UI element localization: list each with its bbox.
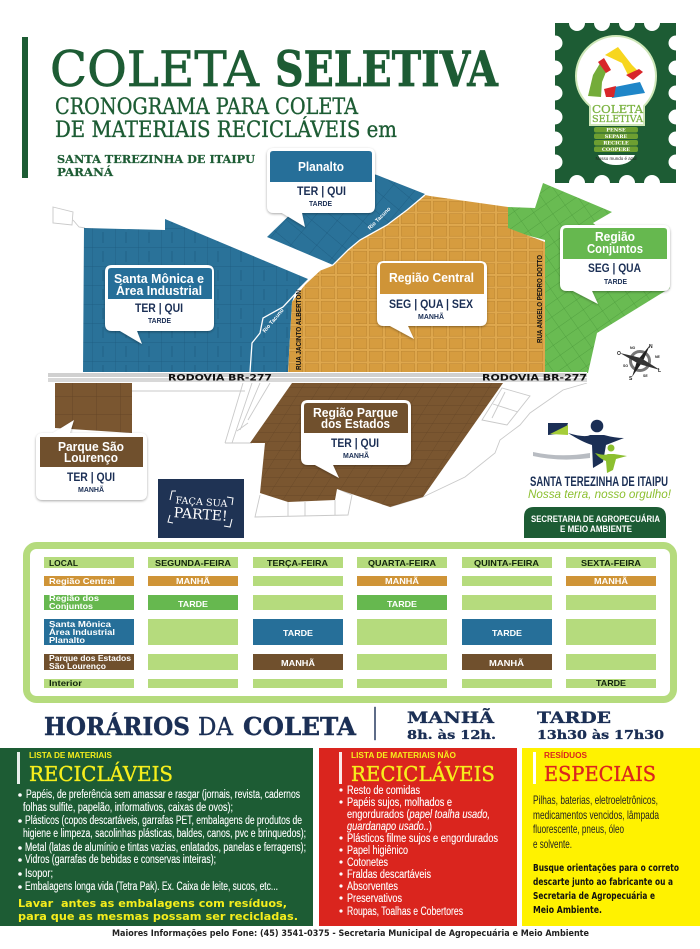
table row text: MANHÃ (281, 658, 315, 668)
non-recyclable list: Cotonetes (347, 857, 388, 869)
table row text (49, 576, 628, 688)
callout: regiao conjuntos: SEG | QUA (588, 261, 641, 275)
road: rodovia br-277: RODOVIA BR-277 (168, 374, 272, 384)
table row text: TARDE (492, 629, 523, 638)
non-recyclable list: Roupas, Toalhas e Cobertores (347, 906, 463, 918)
callout: planalto (267, 148, 375, 227)
table header text: QUARTA-FEIRA (368, 559, 436, 568)
icon: compass: L (658, 368, 661, 374)
collection hours: tarde (537, 708, 664, 742)
panel heading: ESPECIAIS (544, 762, 656, 786)
table row text: TARDE (387, 600, 418, 609)
orange row (44, 576, 656, 586)
stamp logo: coleta seletiva bulb: RECICLE (603, 141, 629, 147)
material list: Plásticos (copos descartáveis, garrafas PET, embalagens de produtos de (25, 815, 302, 827)
collection hours: manha: 8h. às 12h. (407, 727, 496, 742)
material list (18, 789, 306, 893)
non-recyclable list (339, 785, 498, 918)
non-recyclable list: Preservativos (347, 893, 402, 905)
river (250, 195, 425, 372)
subtitle (55, 95, 397, 143)
callout: santa monica e area industrial: TARDE (148, 316, 171, 325)
table header text: LOCAL (49, 559, 78, 568)
map (48, 165, 670, 517)
table row text: São Lourenço (49, 662, 106, 671)
special waste list: fluorescente, pneus, óleo (533, 822, 624, 836)
table header text: SEGUNDA-FEIRA (155, 559, 231, 568)
table header text (49, 559, 641, 568)
callout: parque sao lourenco: Lourenço (64, 450, 118, 465)
label: secretaria de agropecuaria: SECRETARIA DE AGROPECUÁRIA (531, 514, 660, 524)
title: coleta seletiva: SELETIVA (275, 40, 499, 98)
schedule table (26, 546, 674, 700)
icon: flag and figures (533, 420, 627, 473)
callout: parque sao lourenco: Parque São (58, 439, 124, 454)
stamp logo: coleta seletiva bulb: PENSE (606, 128, 626, 134)
panel heading (29, 751, 173, 786)
region: conjuntos (507, 183, 670, 373)
table row text: Planalto (49, 636, 85, 645)
material list: Embalagens longa vida (Tetra Pak). Ex. Caixa de leite, sucos, etc... (25, 881, 278, 893)
panel heading: RESÍDUOS (544, 751, 588, 760)
non-recyclable list: Fraldas descartáveis (347, 869, 431, 881)
region: parque dos estados (250, 383, 503, 507)
guidance note (533, 863, 679, 916)
region: central (288, 195, 545, 373)
title block (22, 37, 499, 179)
callout: parque sao lourenco (36, 420, 147, 500)
panel heading: LISTA DE MATERIAIS NÃO (351, 751, 456, 760)
footer: Maiores Informações pelo Fone: (45) 3541-0375 - Secretaria Municipal de Agropecuária e Meio Ambiente (112, 929, 589, 939)
callout: santa monica e area industrial: Área Industrial (116, 283, 202, 298)
panel: nao reciclaveis (319, 748, 517, 926)
green row (44, 595, 447, 610)
title: coleta seletiva: COLETA (50, 41, 260, 98)
non-recyclable list: Resto de comidas (347, 785, 420, 797)
callout: regiao parque dos estados: dos Estados (321, 416, 390, 431)
material list: Papéis, de preferência sem amassar e rasgar (jornais, revista, cadernos (26, 789, 300, 801)
table row text: MANHÃ (594, 576, 628, 586)
callout: parque sao lourenco: MANHÃ (78, 485, 105, 494)
map outlines (53, 207, 587, 517)
guidance note: Secretaria de Agropecuária e (533, 890, 655, 902)
table row text: Interior (49, 679, 83, 688)
stamp logo: coleta seletiva bulb (548, 15, 684, 191)
stamp logo: coleta seletiva bulb: Nosso mundo é azul (595, 156, 637, 161)
material list: Metal (latas de alumínio e tintas vazias, enlatados, panelas e ferragens); (25, 842, 306, 854)
callout: regiao conjuntos: Região (595, 229, 635, 244)
table header text: QUINTA-FEIRA (474, 559, 539, 568)
badge: faca sua parte (158, 479, 244, 538)
stamp logo: coleta seletiva bulb: SEPARE (605, 134, 628, 140)
blue row (44, 619, 552, 645)
callout: planalto: Planalto (298, 159, 344, 174)
badge: faca sua parte: PARTE! (173, 505, 228, 525)
label: secretaria de agropecuaria (524, 507, 666, 538)
callout: santa monica e area industrial (105, 265, 214, 344)
location: SANTA TEREZINHA DE ITAIPU (57, 152, 255, 166)
icon: compass: SE (643, 374, 648, 378)
special waste list (533, 793, 659, 851)
heading: horarios da coleta: HORÁRIOS (44, 712, 190, 741)
stamp logo: coleta seletiva bulb: COOPERE (602, 147, 630, 153)
logo slogan: Nossa terra, nosso orgulho! (528, 487, 672, 501)
panel heading (544, 751, 656, 786)
callout: regiao central: SEG | QUA | SEX (389, 297, 473, 311)
collection hours: manha: MANHÃ (407, 708, 495, 727)
callout: regiao parque dos estados: TER | QUI (331, 436, 379, 450)
table row text: MANHÃ (385, 576, 419, 586)
stamp logo: coleta seletiva bulb: SELETIVA (592, 114, 643, 125)
icon: compass: O (617, 351, 621, 357)
table row text: Região dos (49, 594, 99, 603)
collection hours: manha (407, 708, 496, 742)
table header text: TERÇA-FEIRA (267, 559, 328, 568)
callout: regiao conjuntos: Conjuntos (587, 241, 643, 256)
panel: reciclaveis (0, 748, 313, 926)
non-recyclable list: Absorventes (347, 881, 398, 893)
label: secretaria de agropecuaria: E MEIO AMBIENTE (560, 524, 632, 534)
callout: regiao central: MANHÃ (418, 312, 445, 321)
heading: horarios da coleta: COLETA (243, 712, 357, 741)
region: santa monica (83, 219, 308, 372)
panel heading: RECICLÁVEIS (29, 762, 173, 786)
callout: parque sao lourenco: TER | QUI (67, 470, 115, 484)
material list: folhas sulfite, papelão, informativos, caixas de ovos); (23, 802, 233, 814)
table row text: MANHÃ (489, 658, 524, 668)
location: PARANÁ (57, 165, 114, 179)
callout: regiao parque dos estados (301, 400, 411, 478)
title: coleta seletiva (50, 40, 499, 98)
brown row (44, 654, 552, 670)
wash note (18, 897, 298, 923)
icon: compass: N (649, 344, 653, 350)
panel heading: LISTA DE MATERIAIS (29, 751, 113, 760)
non-recyclable list: Plásticos filme sujos e engordurados (347, 833, 498, 845)
subtitle: DE MATERIAIS RECICLÁVEIS em (55, 116, 397, 143)
callout: planalto: TARDE (309, 199, 332, 208)
road: rodovia br-277: RODOVIA BR-277 (482, 374, 587, 384)
callout: regiao conjuntos (560, 225, 670, 304)
non-recyclable list: engordurados (papel toalha usado, (347, 809, 490, 821)
panel: residuos especiais (522, 748, 700, 926)
heading: horarios da coleta: DA (198, 712, 233, 741)
icon: compass: S (629, 376, 633, 382)
collection hours: tarde: TARDE (537, 708, 611, 727)
region: planalto (267, 165, 425, 265)
region: parque sao lourenco (55, 382, 132, 433)
table row text: MANHÃ (176, 576, 210, 586)
icon: compass: SO (623, 364, 628, 368)
wash note: para que as mesmas possam ser recicladas. (18, 910, 298, 923)
special waste list: e solvente. (533, 837, 572, 851)
heading: horarios da coleta (44, 707, 376, 741)
table row text: Conjuntos (49, 602, 93, 611)
table row text: Área Industrial (49, 627, 115, 637)
guidance note: Meio Ambiente. (533, 905, 602, 916)
badge: faca sua parte: FAÇA SUA (175, 495, 228, 510)
callout: santa monica e area industrial: Santa Mônica e (114, 271, 204, 286)
table cells (44, 557, 656, 688)
street label: rua angelo pedro dotto: RUA ANGELO PEDRO DOTTO (535, 255, 544, 343)
road: rodovia br-277 (48, 372, 587, 384)
river label: Rio Tacuno (367, 206, 393, 231)
non-recyclable list: guardanapo usado..) (347, 821, 432, 833)
table row text: TARDE (283, 629, 314, 638)
callout: regiao central (377, 261, 487, 339)
icon: compass: NE (655, 355, 661, 359)
table row text: Santa Mônica (49, 620, 112, 629)
callout: santa monica e area industrial: TER | QUI (135, 301, 183, 315)
street label: rua jacinto alberton: RUA JACINTO ALBERTON (294, 290, 303, 370)
stamp logo: coleta seletiva bulb: COLETA (592, 103, 644, 116)
callout: planalto: TER | QUI (297, 184, 346, 198)
table header text: SEXTA-FEIRA (581, 559, 641, 568)
callout: regiao parque dos estados: Região Parque (313, 405, 398, 420)
material list: Vidros (garrafas de bebidas e conservas inteiras); (25, 854, 216, 866)
table row text: TARDE (596, 679, 627, 688)
river label: Rio Tacuno (262, 307, 286, 334)
panel heading (351, 751, 495, 786)
collection hours: tarde: 13h30 às 17h30 (537, 727, 664, 742)
icon: compass (617, 344, 661, 382)
location (57, 152, 255, 179)
callout: regiao conjuntos: TARDE (604, 277, 627, 286)
non-recyclable list: Papéis sujos, molhados e (347, 797, 452, 809)
table row text: Parque dos Estados (49, 654, 131, 663)
callout: regiao parque dos estados: MANHÃ (343, 451, 370, 460)
wash note: Lavar antes as embalagens com resíduos, (18, 897, 287, 910)
non-recyclable list: Papel higiênico (347, 845, 408, 857)
panel heading: RECICLÁVEIS (351, 762, 495, 786)
table row text: Região Central (49, 577, 115, 586)
callout: regiao central: Região Central (389, 270, 474, 285)
material list: higiene e limpeza, sacolinhas plásticas, baldes, canos, pvc e brinquedos); (23, 828, 306, 840)
logo: santa terezinha de itaipu (524, 420, 672, 538)
subtitle: CRONOGRAMA PARA COLETA (55, 95, 359, 120)
table row text: TARDE (178, 600, 209, 609)
icon: compass: NO (630, 346, 636, 350)
material list: Isopor; (25, 868, 53, 880)
